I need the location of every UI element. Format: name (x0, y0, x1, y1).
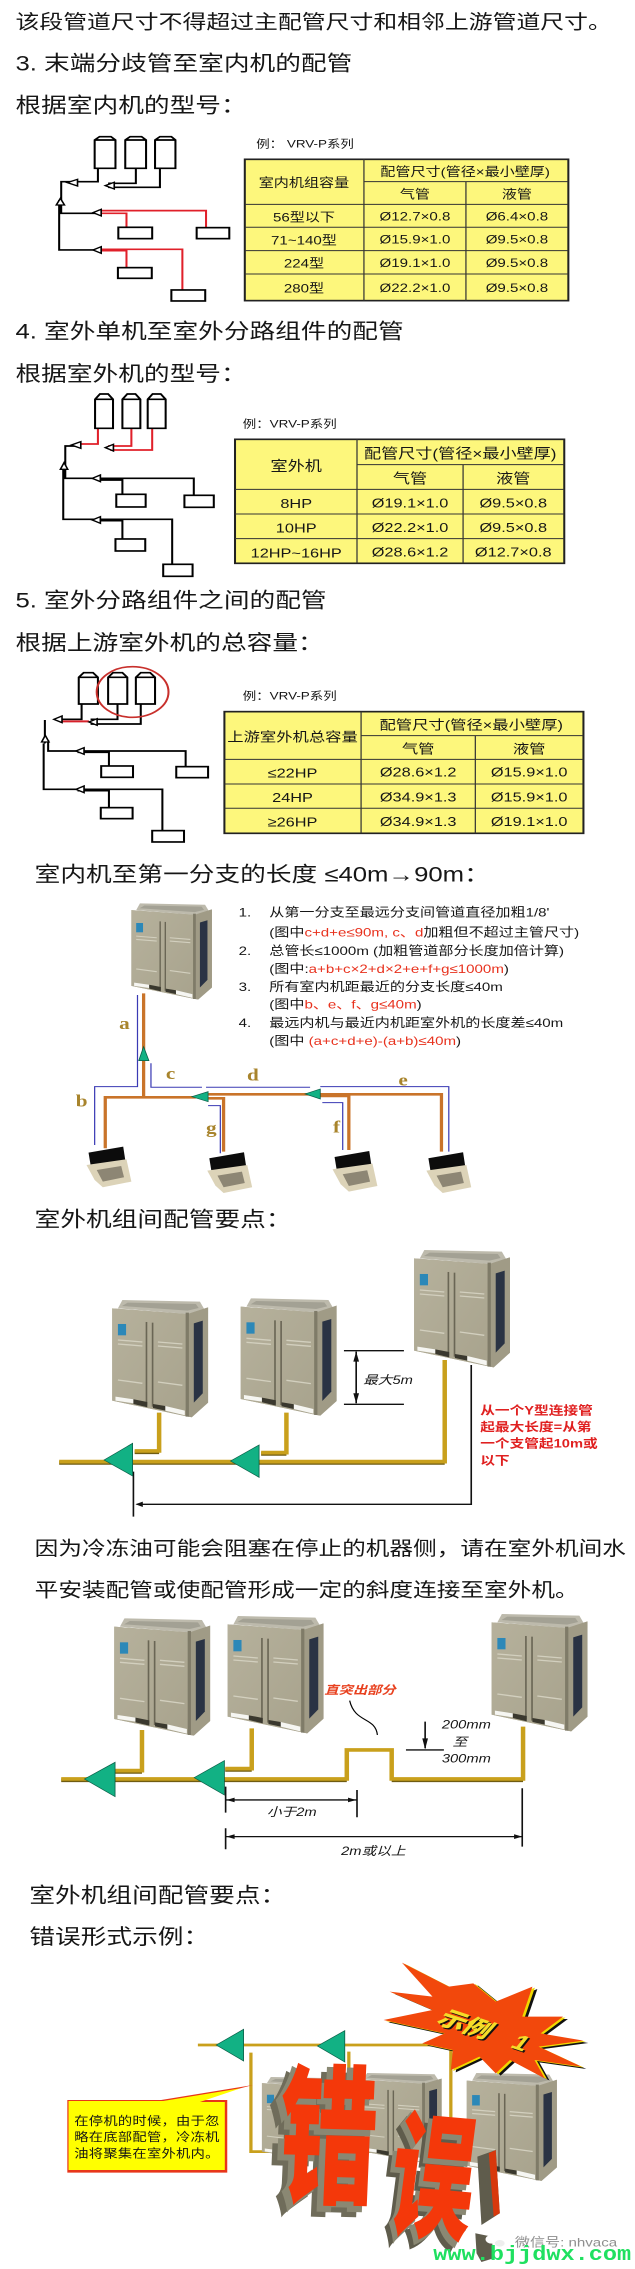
schematic: outdoor unit piping (60, 394, 214, 576)
table: outdoor unit: Ø9.5×0.8 (479, 521, 547, 536)
subheading: 根据室内机的型号： (16, 94, 247, 117)
notes list: 3. (239, 980, 251, 994)
subheading: 根据室外机的型号： (16, 362, 247, 385)
piping diagram: e (398, 1071, 408, 1090)
table: upstream capacity: Ø28.6×1.2 (380, 766, 457, 780)
table: indoor unit capacity: Ø6.4×0.8 (486, 210, 549, 223)
dimension: under 2m (226, 1787, 357, 1819)
table: upstream capacity: 气管 (402, 742, 435, 757)
notes list: 2. (239, 944, 251, 958)
table: upstream capacity (224, 712, 583, 833)
piping diagram: g (206, 1119, 217, 1138)
piping diagram: a (119, 1015, 130, 1033)
big 3D text: error: 误 (378, 2105, 480, 2264)
table: upstream capacity: Ø15.9×1.0 (491, 766, 567, 780)
section: length to first branch (35, 863, 579, 1193)
schematic: indoor unit piping (56, 137, 229, 301)
table: indoor unit capacity (245, 159, 568, 301)
big 3D text: error: 错 (276, 2054, 381, 2225)
heading 5: 5. 室外分路组件之间的配管 (16, 589, 327, 612)
table: indoor unit capacity: 气管 (400, 188, 430, 201)
table: outdoor unit: Ø28.6×1.2 (372, 546, 448, 560)
notes list (239, 905, 579, 1048)
table: upstream capacity: Ø34.9×1.3 (380, 815, 457, 830)
schematic: branch sets piping (42, 667, 208, 842)
starburst: example 1: 示例 1 (435, 2007, 534, 2058)
dimension: 2m or more (226, 1788, 522, 1858)
callout: 油将聚集在室外机内。 (74, 2147, 220, 2160)
table caption: 例： VRV-P系列 (256, 137, 354, 150)
table: outdoor unit: 8HP (280, 497, 312, 512)
heading 4: 4. 室外单机至室外分路组件的配管 (16, 320, 404, 343)
notes list: (图中c+d+e≤90m, c、d加粗但不超过主管尺寸) (269, 926, 579, 939)
red note (480, 1403, 598, 1467)
section: error example (29, 1884, 631, 2269)
dimension: 200-300mm: 300mm (442, 1752, 491, 1765)
section 3: indoor unit branch piping (16, 10, 612, 301)
notes list: (图中b、e、f、g≤40m) (269, 998, 422, 1011)
table: indoor unit capacity: 56型以下 (273, 211, 335, 224)
gold piping (59, 1360, 471, 1517)
table: outdoor unit: 液管 (496, 471, 530, 487)
piping diagram: f (333, 1118, 341, 1137)
section 5: between branch sets (16, 589, 583, 842)
table: outdoor unit: 气管 (393, 471, 427, 487)
table: indoor unit capacity: Ø15.9×1.0 (380, 233, 451, 246)
outdoor units with height difference (112, 1250, 510, 1417)
table: indoor unit capacity: 配管尺寸(管径×最小壁厚) (380, 165, 550, 179)
section 4: outdoor unit to branch piping (16, 320, 564, 576)
notes list: 最远内机与最近内机距室外机的长度差≤40m (269, 1015, 563, 1030)
notes list: 从第一分支至最远分支间管道直径加粗1/8' (269, 905, 549, 919)
table: indoor unit capacity: 液管 (502, 188, 532, 201)
heading: 室外机组间配管要点： (29, 1884, 286, 1907)
subheading: 错误形式示例： (29, 1925, 209, 1948)
table: upstream capacity: 上游室外机总容量 (227, 730, 358, 745)
table caption: 例：VRV-P系列 (243, 689, 337, 702)
dimension: under 2m: 小于2m (267, 1805, 317, 1819)
notes list: 4. (239, 1016, 251, 1030)
notes list: (图中 (a+c+d+e)-(a+b)≤40m) (269, 1034, 461, 1048)
heading: 室外机组间配管要点： (35, 1208, 292, 1231)
heading: length limit: 室内机至第一分支的长度 ≤40m→90m： (35, 863, 490, 886)
piping diagram: c (166, 1065, 176, 1083)
dimension: 2m or more: 2m或以上 (340, 1844, 406, 1858)
outdoor units (114, 1614, 588, 1736)
watermark: wechat: 微信号: nhvaca (515, 2236, 617, 2249)
table: indoor unit capacity: Ø9.5×0.8 (486, 281, 549, 295)
table: outdoor unit: Ø9.5×0.8 (479, 497, 547, 511)
table: upstream capacity: 配管尺寸(管径×最小壁厚) (379, 718, 563, 733)
section: outdoor unit group piping points (35, 1208, 598, 1517)
dimension: 200-300mm: 至 (452, 1735, 469, 1749)
dimension: max 5m: 最大5m (363, 1373, 413, 1387)
table: indoor unit capacity: Ø12.7×0.8 (380, 210, 451, 223)
dimension: 200-300mm (406, 1718, 491, 1765)
table: outdoor unit: 室外机 (271, 458, 322, 475)
big 3D text: error: 误 (374, 2109, 476, 2269)
table: outdoor unit: Ø12.7×0.8 (475, 546, 552, 560)
big 3D text: error: 错 (270, 2059, 375, 2230)
table: upstream capacity: ≥26HP (268, 816, 317, 830)
paragraph: 平安装配管或使配管形成一定的斜度连接至室外机。 (35, 1579, 579, 1601)
table: indoor unit capacity: Ø22.2×1.0 (380, 281, 451, 295)
piping diagram: b (76, 1092, 88, 1111)
indoor units (86, 1147, 471, 1193)
callout: 在停机的时候，由于忽 (74, 2114, 220, 2128)
table: upstream capacity: Ø34.9×1.3 (380, 791, 457, 805)
table: outdoor unit: 10HP (276, 522, 317, 536)
big 3D text: error (265, 2054, 500, 2269)
table: indoor unit capacity: 224型 (284, 257, 324, 270)
callout: 略在底部配管，冷冻机 (74, 2130, 220, 2144)
notes list: 1. (239, 906, 251, 919)
paragraph (35, 1537, 626, 1601)
notes list: (图中:a+b+c×2+d×2+e+f+g≤1000m) (269, 962, 509, 976)
table: outdoor unit: 配管尺寸(管径×最小壁厚) (364, 446, 556, 462)
big 3D text: error: 误 (382, 2101, 484, 2260)
label: vertical protrusion: 直突出部分 (324, 1683, 398, 1697)
curved arrow (350, 1701, 377, 1735)
big 3D text: error: 错 (265, 2064, 370, 2235)
table: indoor unit capacity: Ø9.5×0.8 (486, 233, 549, 246)
text: line continued from previous page: 该段管道尺寸不得超过主配管尺寸和相邻上游管道尺寸。 (16, 10, 612, 33)
red note: 起最大长度=从第 (480, 1419, 592, 1434)
table: upstream capacity: Ø15.9×1.0 (491, 791, 567, 805)
paragraph: 因为冷冻油可能会阻塞在停止的机器侧，请在室外机间水 (35, 1537, 626, 1559)
heading 3: 3. 末端分歧管至室内机的配管 (16, 52, 352, 75)
table: outdoor unit: Ø19.1×1.0 (372, 497, 448, 511)
piping diagram (76, 993, 449, 1153)
table: outdoor unit: 12HP~16HP (251, 547, 342, 561)
table: indoor unit capacity: 71~140型 (271, 234, 337, 247)
red note: 一个支管起10m或 (480, 1436, 598, 1450)
table caption: 例：VRV-P系列 (243, 418, 337, 430)
notes list: 所有室内机距最近的分支长度≤40m (269, 979, 503, 994)
table: upstream capacity: 24HP (272, 791, 313, 806)
gold piping (198, 2029, 451, 2152)
section: horizontal installation (35, 1537, 626, 1858)
table: upstream capacity: Ø19.1×1.0 (491, 815, 567, 830)
gold piping with trap (61, 1727, 523, 1797)
dimension: max 5m (344, 1351, 413, 1404)
table: outdoor unit (235, 439, 564, 563)
red note: 从一个Y型连接管 (480, 1403, 593, 1417)
table: indoor unit capacity: 280型 (284, 282, 324, 295)
table: upstream capacity: ≤22HP (268, 767, 317, 781)
piping diagram: d (247, 1066, 259, 1085)
starburst: example 1: 示例 1 (433, 2005, 533, 2057)
table: outdoor unit: Ø22.2×1.0 (372, 521, 448, 536)
starburst: example 1 (384, 1963, 588, 2081)
callout (67, 2085, 253, 2173)
notes list: 总管长≤1000m (加粗管道部分长度加倍计算) (269, 944, 564, 958)
table: indoor unit capacity: 室内机组容量 (259, 175, 349, 190)
table: upstream capacity: 液管 (513, 742, 545, 757)
dimension: 200-300mm: 200mm (441, 1718, 491, 1731)
table: indoor unit capacity: Ø9.5×0.8 (486, 256, 549, 270)
outdoor units (262, 2073, 557, 2181)
subheading: 根据上游室外机的总容量： (16, 631, 324, 654)
table: indoor unit capacity: Ø19.1×1.0 (380, 256, 451, 270)
red note: 以下 (480, 1454, 510, 1467)
outdoor unit (131, 903, 212, 1000)
